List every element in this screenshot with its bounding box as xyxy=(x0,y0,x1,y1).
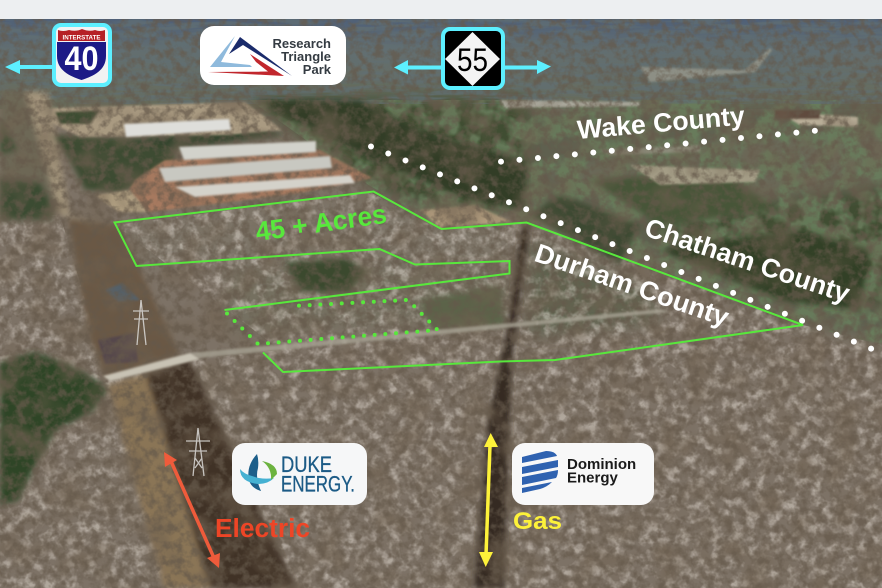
logo: Duke Energy: DUKE xyxy=(281,452,332,477)
site boundary outline xyxy=(114,192,803,372)
label: Electric: Electric xyxy=(215,515,310,543)
tan field xyxy=(50,102,282,137)
sky xyxy=(0,0,882,19)
label: Wake County: Wake County xyxy=(576,100,746,145)
logo: Research Triangle Park: Park xyxy=(303,62,332,77)
icon: Interstate 40 shield: INTERSTATE xyxy=(62,34,100,42)
county boundary: Chatham / Durham xyxy=(371,146,872,349)
warehouses and road xyxy=(103,119,670,381)
arrow: electric line corridor xyxy=(164,452,220,568)
icon: Interstate 40 shield xyxy=(54,25,110,85)
county boundary: Wake xyxy=(501,129,833,162)
logo: Duke Energy xyxy=(232,443,367,505)
logo: Dominion Energy xyxy=(512,443,654,505)
ponds xyxy=(105,283,140,302)
logo: Research Triangle Park xyxy=(200,26,346,85)
arrow: NC 55 west xyxy=(394,60,442,74)
upper-left clearings xyxy=(0,90,60,215)
label: Chatham County: Chatham County xyxy=(641,212,854,309)
arrow: gas line corridor xyxy=(479,433,498,567)
logo: Research Triangle Park: Triangle xyxy=(281,49,331,64)
construction site dirt xyxy=(120,150,372,212)
pine clump in site xyxy=(285,258,368,292)
icon: Interstate 40 shield: 40 xyxy=(64,40,98,78)
forest clumps xyxy=(660,230,870,310)
logo: Dominion Energy: Energy xyxy=(567,470,619,486)
pines lower left xyxy=(0,352,108,505)
label: 45 + Acres: 45 + Acres xyxy=(254,199,389,247)
icon: NC 55 highway sign xyxy=(443,29,503,88)
clearing near corridor xyxy=(420,205,512,228)
excluded parcel dotted outline xyxy=(227,300,438,344)
label: Gas: Gas xyxy=(513,508,562,535)
logo: Research Triangle Park: Research xyxy=(272,36,331,51)
logo: Dominion Energy: Dominion xyxy=(567,456,636,473)
powerline corridor xyxy=(68,218,180,378)
arrow: I-40 west xyxy=(5,60,53,74)
gas corridor xyxy=(474,225,530,588)
arrow: NC 55 east xyxy=(504,60,551,74)
distant features xyxy=(500,100,640,108)
icon: NC 55 highway sign: 55 xyxy=(457,42,488,78)
icon: transmission towers xyxy=(133,300,210,476)
logo: Duke Energy: ENERGY. xyxy=(281,472,355,496)
label: Durham County: Durham County xyxy=(531,238,733,332)
